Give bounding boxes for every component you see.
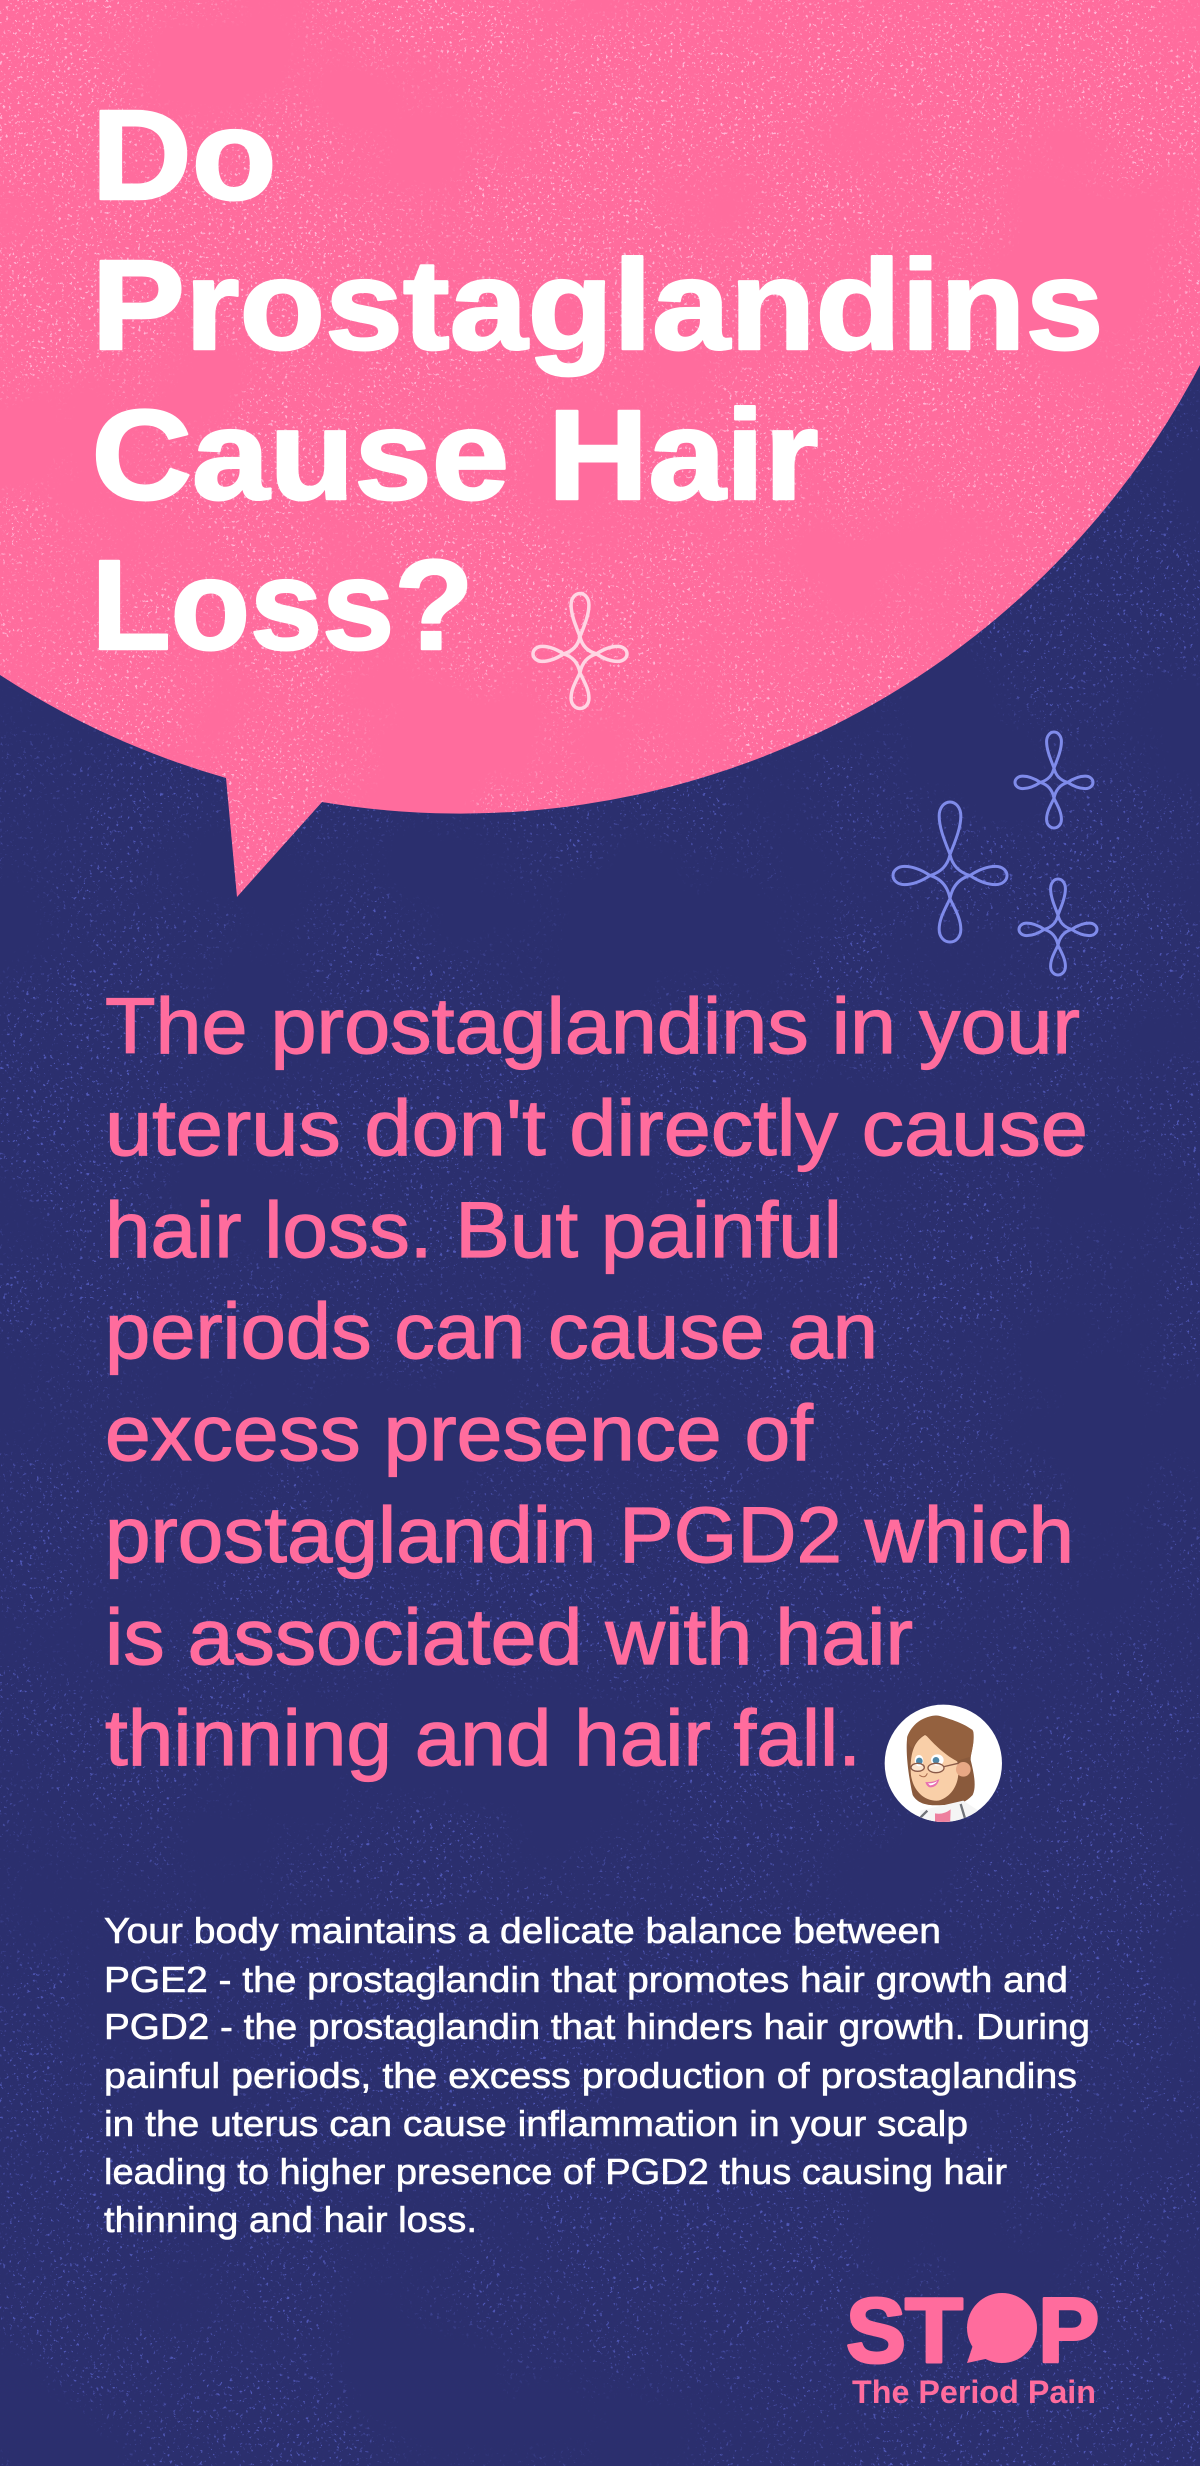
title: Loss? [92,534,474,677]
title: Do [92,84,276,227]
body paragraph: PGD2 - the prostaglandin that hinders hair growth. During [104,2006,1090,2047]
body paragraph: Your body maintains a delicate balance between [104,1910,941,1951]
body paragraph: PGE2 - the prostaglandin that promotes hair growth and [104,1959,1068,2000]
logo: Stop The Period Pain: S [846,2280,906,2382]
body paragraph: in the uterus can cause inflammation in your scalp [104,2103,968,2144]
body paragraph: leading to higher presence of PGD2 thus causing hair [104,2151,1007,2192]
icon: large blue sparkle [893,802,1007,942]
icon: upper blue sparkle [1015,732,1093,828]
title: Cause Hair [92,384,818,527]
pink lead paragraph [105,981,1088,1782]
pink lead paragraph: hair loss. But painful [105,1185,842,1274]
pink lead paragraph: is associated with hair [105,1592,913,1681]
pink lead paragraph: The prostaglandins in your [105,981,1080,1070]
logo: Stop The Period Pain: T [905,2280,963,2382]
pink lead paragraph: thinning and hair fall. [105,1693,861,1782]
pink lead paragraph: uterus don't directly cause [105,1083,1088,1172]
logo: Stop The Period Pain: The Period Pain [852,2374,1096,2410]
body paragraph: thinning and hair loss. [104,2199,477,2240]
body paragraph [104,1910,1090,2240]
pink lead paragraph: prostaglandin PGD2 which [105,1490,1074,1579]
pink lead paragraph: excess presence of [105,1388,814,1477]
speech bubble [0,0,1200,900]
logo: Stop The Period Pain [846,2280,1099,2410]
icon: doctor avatar [885,1705,1002,1827]
pink lead paragraph: periods can cause an [105,1286,878,1375]
icon: lower blue sparkle [1019,879,1097,975]
title [92,84,1104,677]
title: Prostaglandins [92,234,1104,377]
body paragraph: painful periods, the excess production of prostaglandins [104,2055,1077,2096]
logo: Stop The Period Pain: P [1038,2280,1099,2382]
icon: sparkle in bubble [533,594,627,708]
